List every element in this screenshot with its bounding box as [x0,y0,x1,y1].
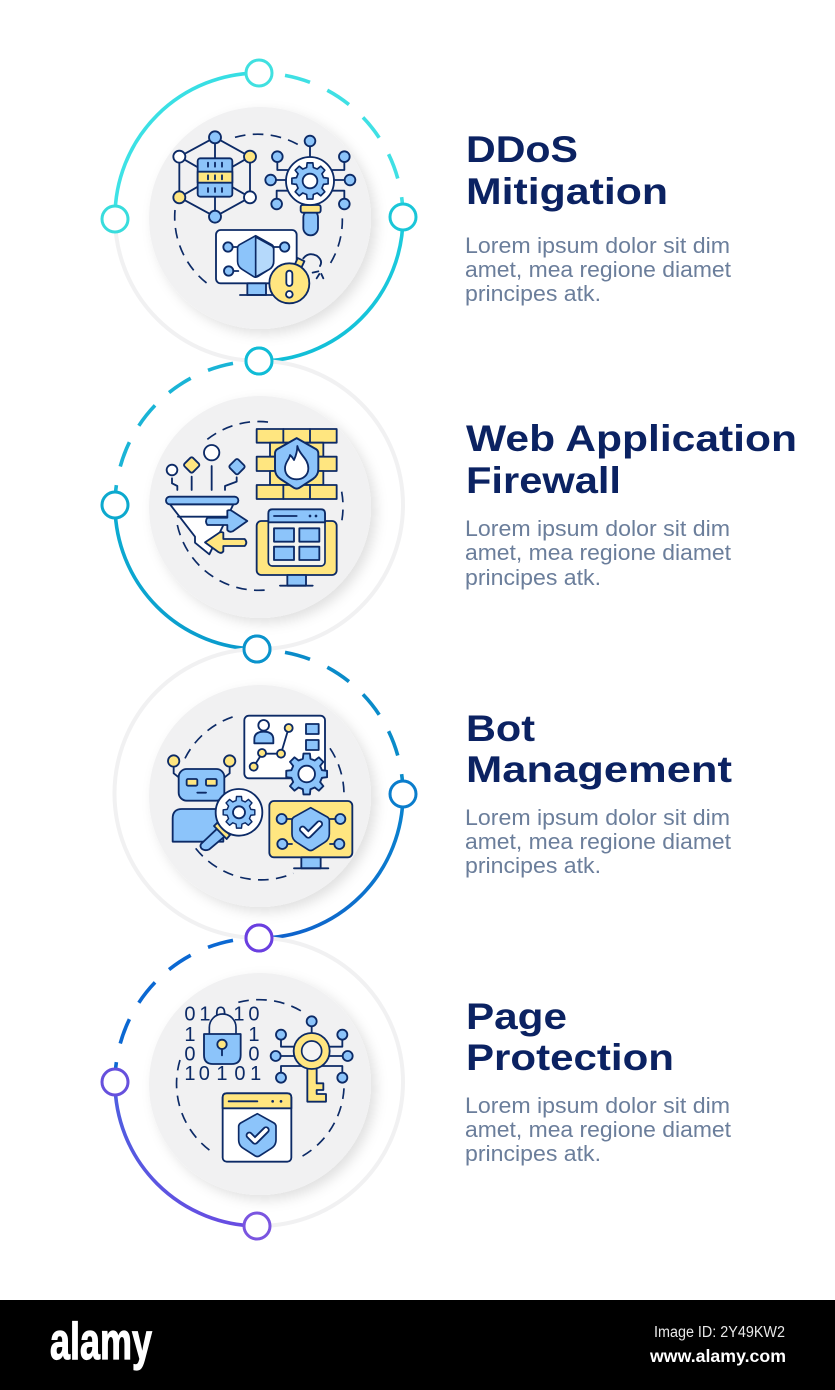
ring: Bot Management [115,636,416,951]
panel: Page Protection [102,925,732,1239]
icon: binary lock, key network and secure page: 11 [184,1024,260,1046]
watermark footer bar [0,1300,835,1390]
disc [149,685,371,907]
image id: Image ID: 2Y49KW2 [654,1324,785,1341]
heading: Bot Management: Management [466,749,732,790]
icon: binary lock, key network and secure page [177,1000,353,1162]
heading: Web Application Firewall: Firewall [466,460,621,501]
heading: Bot Management: Bot [466,708,535,749]
text block: principes atk. [465,1141,601,1166]
heading: Page Protection: Page [466,996,567,1037]
heading: Web Application Firewall: Web Application [466,418,797,459]
heading: Page Protection: Protection [466,1037,674,1078]
icon: bot, dashboard and secured monitor [168,716,352,880]
ring: Page Protection [102,925,403,1239]
icon: binary lock, key network and secure page: 00 [184,1044,260,1066]
text block: Lorem ipsum dolor sit dim [465,233,730,258]
disc [149,107,371,329]
heading: DDoS Mitigation: Mitigation [466,171,668,212]
icon: binary lock, key network and secure page: 01010 [184,1004,260,1026]
heading: DDoS Mitigation: DDoS [466,129,578,170]
text block: principes atk. [465,565,601,590]
text block: amet, mea regione diamet [465,540,732,565]
panel: DDoS Mitigation [102,60,732,374]
panel: Web Application Firewall [102,348,797,662]
ring: Web Application Firewall [102,348,403,662]
disc [149,973,371,1195]
text block: principes atk. [465,281,601,306]
text block: amet, mea regione diamet [465,257,732,282]
site url: www.alamy.com [649,1346,786,1366]
panel: Bot Management [115,636,732,951]
text block: principes atk. [465,853,601,878]
icon: funnel, brick firewall and web monitor [166,422,343,590]
text block: Lorem ipsum dolor sit dim [465,516,730,541]
ring: DDoS Mitigation [102,60,416,374]
text block: amet, mea regione diamet [465,1117,732,1142]
disc [149,396,371,618]
icon: binary lock, key network and secure page: 10101 [184,1063,261,1085]
text block: Lorem ipsum dolor sit dim [465,805,730,830]
text block: amet, mea regione diamet [465,829,732,854]
text block: Lorem ipsum dolor sit dim [465,1093,730,1118]
logo: alamy: alamy [50,1313,152,1371]
icon: server network, gear and alert monitor [173,131,355,303]
